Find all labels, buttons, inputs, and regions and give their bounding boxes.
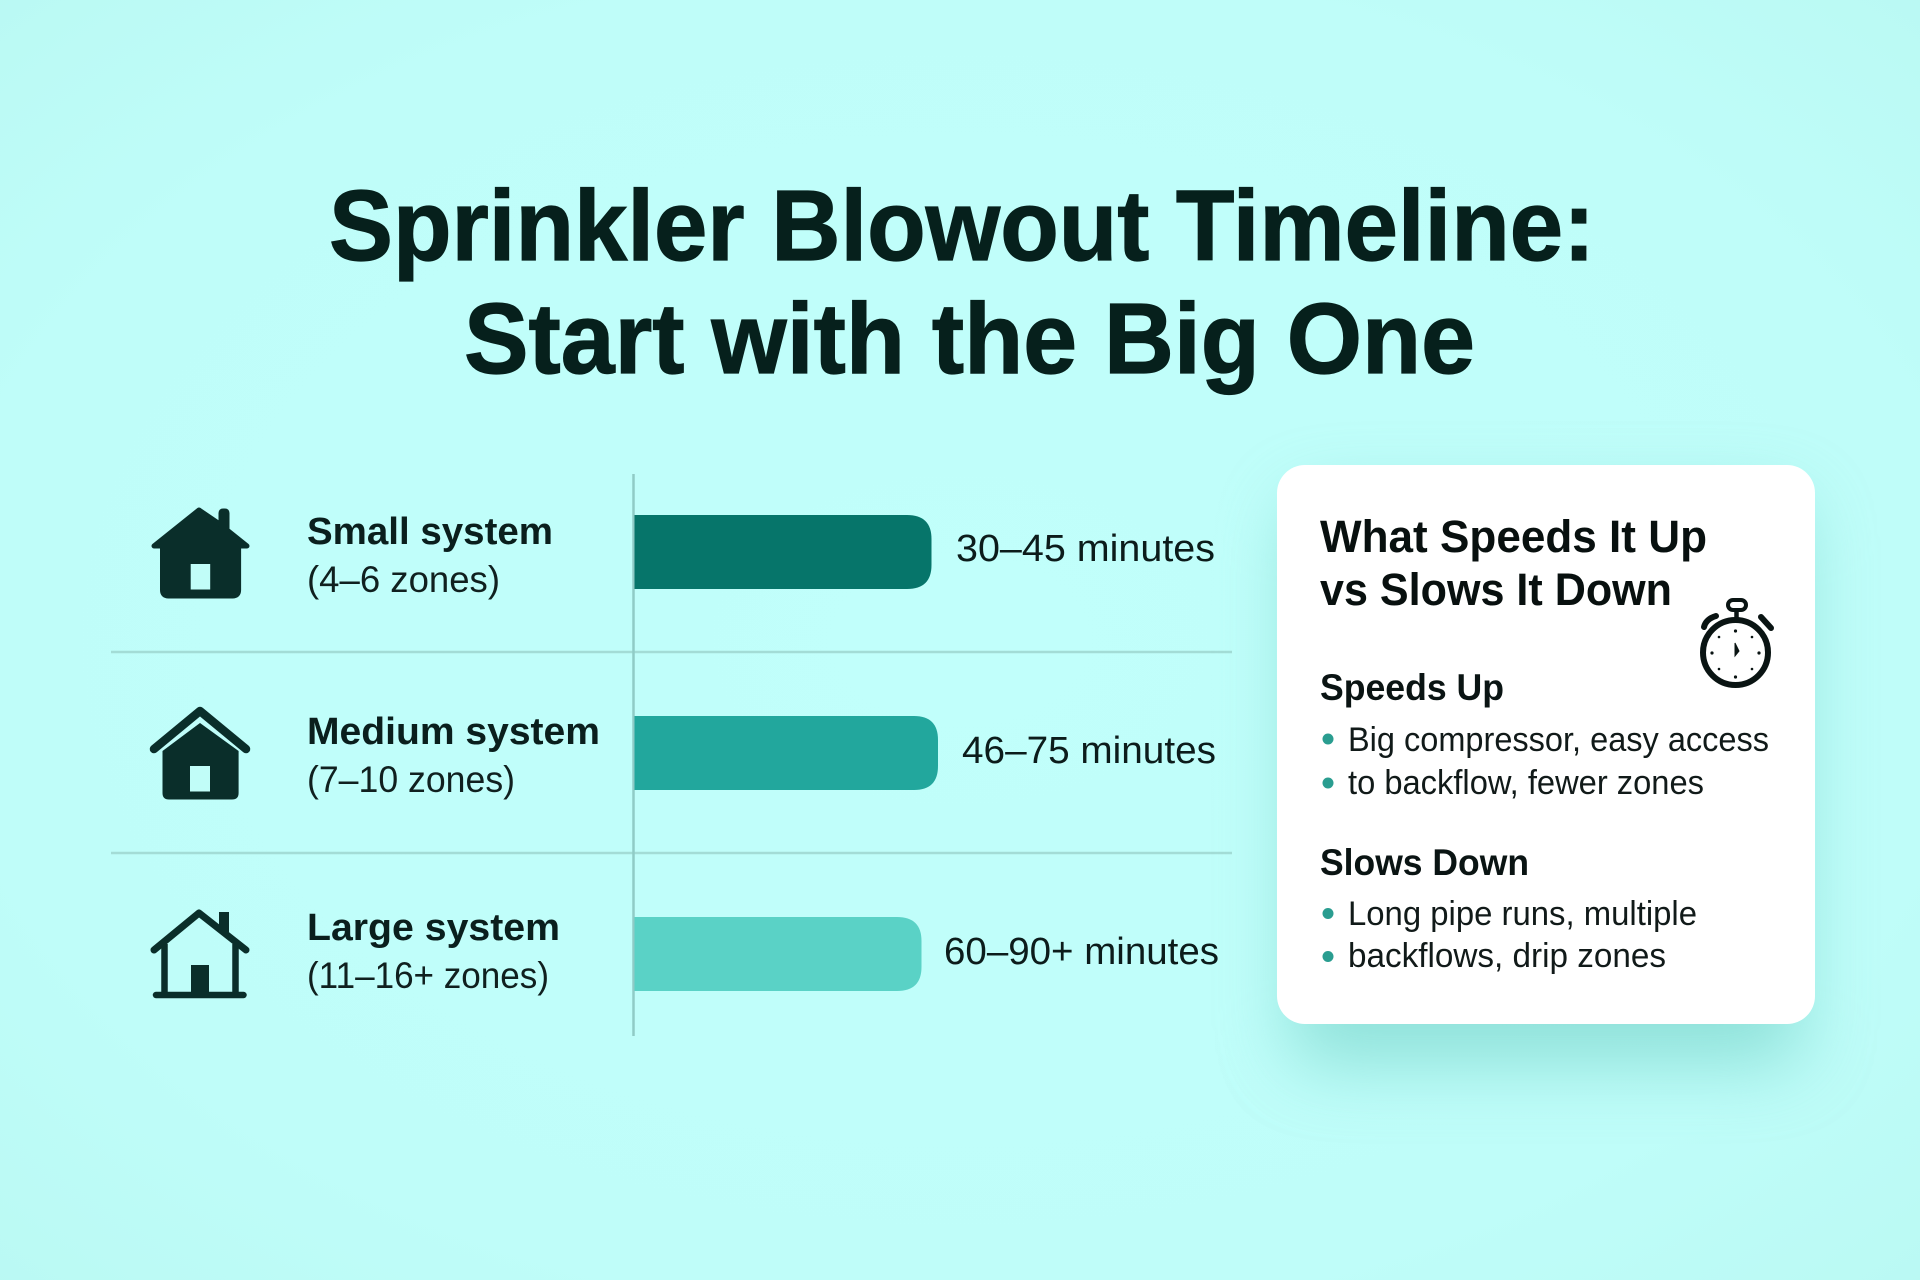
speeds up section — [1320, 667, 1769, 802]
label: medium system — [307, 711, 600, 800]
slows down section: Slows Down — [1320, 842, 1529, 883]
speeds up section: to backflow, fewer zones — [1348, 764, 1704, 802]
label: medium system: (7–10 zones) — [307, 759, 515, 800]
bar: small system — [634, 515, 932, 589]
panel: large system row — [154, 907, 1219, 996]
slows down section: Long pipe runs, multiple — [1348, 895, 1697, 933]
bar: medium system — [634, 716, 938, 790]
icon: medium house — [154, 711, 246, 800]
title: Start with the Big One — [464, 283, 1475, 395]
label: small system: Small system — [307, 511, 553, 553]
label: large system: (11–16+ zones) — [307, 955, 549, 996]
icon: large house — [154, 912, 246, 995]
card heading — [1320, 511, 1707, 615]
label: small system — [307, 511, 553, 600]
icon: small house — [154, 510, 247, 596]
label: large system: Large system — [307, 907, 560, 949]
bar: large system — [634, 917, 922, 991]
slows down section — [1320, 842, 1697, 975]
label: large system — [307, 907, 560, 996]
value: large system: 60–90+ minutes — [944, 931, 1219, 973]
speeds up section: Speeds Up — [1320, 667, 1504, 708]
label: small system: (4–6 zones) — [307, 559, 500, 600]
panel: medium system row — [154, 711, 1216, 800]
slows down section: backflows, drip zones — [1348, 937, 1666, 975]
panel: what speeds it up card — [1277, 465, 1815, 1065]
panel: small system row — [154, 510, 1215, 600]
speeds up section: Big compressor, easy access — [1348, 721, 1769, 759]
label: medium system: Medium system — [307, 711, 600, 753]
title: Sprinkler Blowout Timeline: — [329, 170, 1595, 282]
card heading: vs Slows It Down — [1320, 564, 1672, 615]
title — [329, 170, 1595, 395]
icon: stopwatch — [1703, 600, 1771, 685]
value: medium system: 46–75 minutes — [962, 730, 1216, 772]
card heading: What Speeds It Up — [1320, 511, 1707, 562]
value: small system: 30–45 minutes — [956, 528, 1215, 570]
